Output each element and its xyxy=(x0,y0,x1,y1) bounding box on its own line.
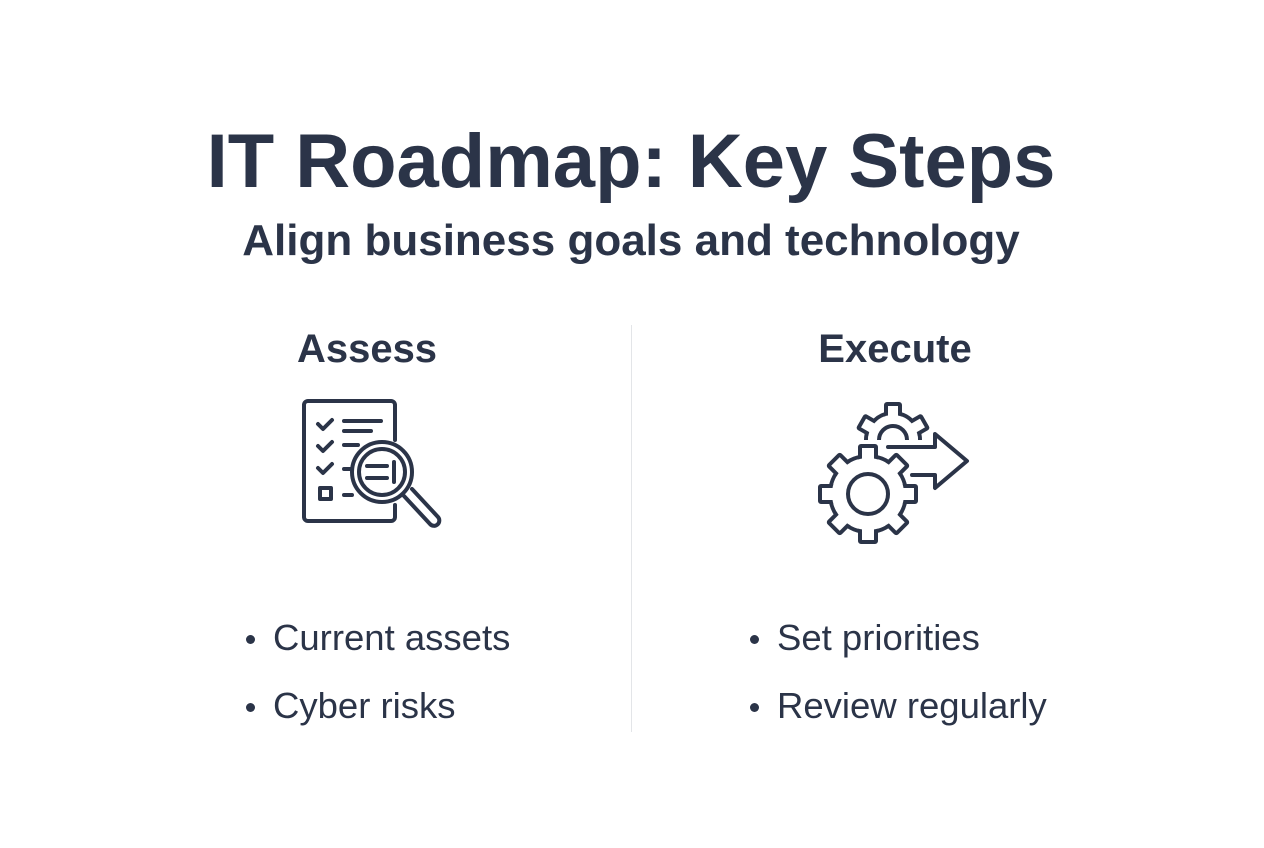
panel: assess xyxy=(246,327,510,726)
title: IT Roadmap: Key Steps xyxy=(207,119,1055,204)
icon: gears with arrow xyxy=(818,402,970,544)
heading: execute: Execute xyxy=(818,327,972,371)
icon: checklist with magnifier xyxy=(302,399,442,528)
bullet: cyber risks: Cyber risks xyxy=(273,685,456,726)
divider xyxy=(631,325,632,732)
bullet: set priorities: Set priorities xyxy=(777,617,980,658)
heading: assess: Assess xyxy=(297,327,437,371)
subtitle: Align business goals and technology xyxy=(242,216,1020,265)
bullet: current assets: Current assets xyxy=(273,617,510,658)
bullet: review regularly: Review regularly xyxy=(777,685,1047,726)
panel: execute xyxy=(750,327,1047,726)
